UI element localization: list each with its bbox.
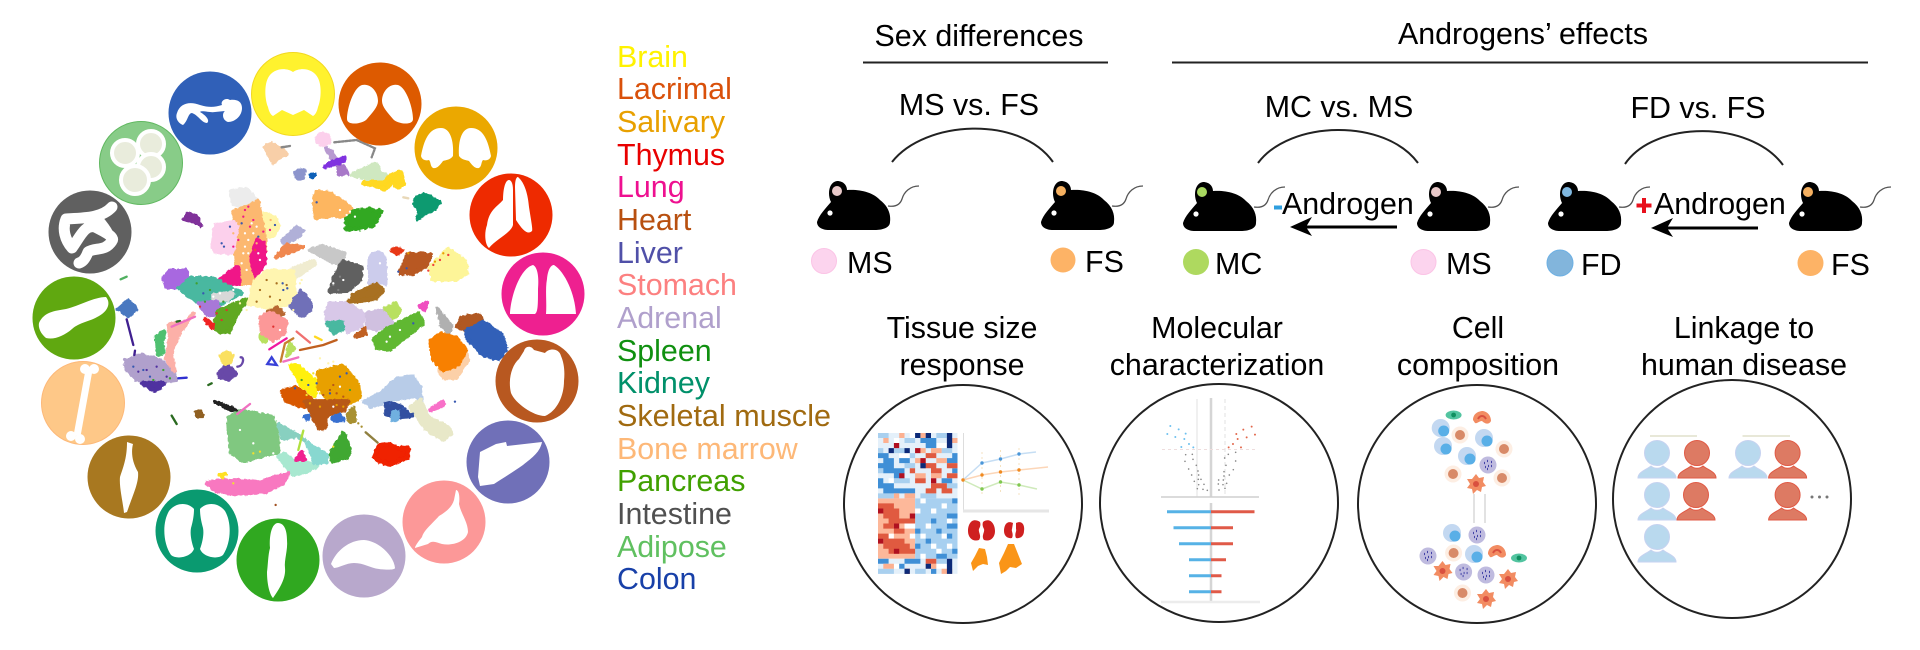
organ icon ring: [32, 52, 584, 602]
heading: sex differences: Sex differences: [875, 19, 1083, 53]
tissue legend: Skeletal muscle: [617, 399, 831, 433]
panel: cell composition: [1358, 385, 1596, 623]
tissue legend: Salivary: [617, 105, 726, 139]
comparison: MS vs FS: MS vs. FS: [899, 88, 1039, 122]
icon: colon: [168, 72, 252, 154]
icon: adipose: [100, 122, 182, 204]
icon: brain: [252, 52, 334, 136]
heading: linkage to human disease: human disease: [1641, 348, 1847, 382]
heading: cell composition: composition: [1397, 348, 1559, 382]
tissue legend: Brain: [617, 40, 688, 74]
icon: liver: [466, 420, 550, 504]
heading: tissue size response: response: [899, 348, 1025, 382]
tissue legend: Stomach: [617, 268, 737, 302]
tissue legend: Intestine: [617, 497, 732, 531]
panel: linkage to human disease: [1613, 380, 1851, 618]
tissue legend: Liver: [617, 236, 683, 270]
icon: spleen: [236, 518, 320, 602]
heading: linkage to human disease: [1641, 311, 1847, 382]
heading: molecular characterization: characterization: [1110, 348, 1324, 382]
icon: adrenal: [322, 514, 406, 598]
heading: cell composition: [1397, 311, 1559, 382]
tissue legend: Colon: [617, 562, 696, 596]
tissue legend: Lung: [617, 170, 685, 204]
icon: salivary gland: [414, 106, 498, 190]
icon: kidney: [156, 490, 238, 572]
tissue legend: Thymus: [617, 138, 725, 172]
heading: androgens' effects: Androgens’ effects: [1398, 17, 1648, 51]
icon: bone marrow: [42, 362, 124, 444]
heading: linkage to human disease: Linkage to: [1674, 311, 1814, 345]
diverging bar chart: [1161, 503, 1260, 603]
icon: orange glands: [971, 544, 1022, 574]
comparison: MC vs MS: [1183, 90, 1519, 281]
icon: lacrimal gland: [338, 62, 422, 146]
heading: molecular characterization: [1110, 311, 1324, 382]
comparison: FD vs FS: Androgen: [1654, 187, 1786, 221]
panel: tissue size response: [844, 385, 1082, 623]
bottom cell cluster: [1420, 524, 1527, 609]
icon: kidneys: [968, 520, 1024, 541]
tissue legend: [617, 40, 831, 596]
icon: skeletal muscle: [88, 436, 170, 518]
icon: intestine: [48, 190, 132, 274]
comparison: FD vs FS: [1547, 91, 1891, 282]
tissue legend: Kidney: [617, 366, 711, 400]
comparison: MS vs FS: MS: [847, 246, 893, 280]
comparison: FD vs FS: FD vs. FS: [1630, 91, 1766, 125]
volcano plot: [1161, 398, 1259, 497]
comparison: MS vs FS: [812, 88, 1143, 280]
comparison: FD vs FS: FS: [1831, 248, 1870, 282]
bidirectional arrows: [1474, 494, 1485, 523]
comparison: MC vs MS: MC: [1215, 247, 1262, 281]
patient groups: [1638, 436, 1807, 562]
tissue legend: Adipose: [617, 530, 727, 564]
comparison: FD vs FS: FD: [1581, 248, 1622, 282]
icon: pancreas: [32, 276, 116, 360]
comparison: MC vs MS: MS: [1446, 247, 1492, 281]
icon: stomach: [402, 480, 486, 564]
top cell cluster: [1432, 410, 1512, 494]
comparison: MC vs MS: MC vs. MS: [1265, 90, 1413, 124]
tissue legend: Bone marrow: [617, 432, 799, 466]
UMAP cell cluster plot: [119, 134, 506, 505]
tissue legend: Heart: [617, 203, 692, 237]
icon: heart: [496, 340, 578, 422]
tissue legend: Adrenal: [617, 301, 722, 335]
heading: cell composition: Cell: [1452, 311, 1504, 345]
icon: thymus: [470, 174, 552, 256]
tissue legend: Pancreas: [617, 464, 745, 498]
heading: tissue size response: Tissue size: [887, 311, 1037, 345]
heading: molecular characterization: Molecular: [1151, 311, 1283, 345]
heatmap: [878, 433, 958, 574]
tissue legend: Spleen: [617, 334, 712, 368]
line chart: [961, 433, 1049, 512]
comparison: MS vs FS: FS: [1085, 245, 1124, 279]
tissue legend: Lacrimal: [617, 72, 732, 106]
heading: tissue size response: [887, 311, 1037, 382]
comparison: MC vs MS: Androgen: [1282, 187, 1414, 221]
panel: molecular characterization: [1100, 384, 1338, 622]
icon: lung: [502, 252, 584, 336]
ellipsis dots: [1810, 496, 1828, 498]
